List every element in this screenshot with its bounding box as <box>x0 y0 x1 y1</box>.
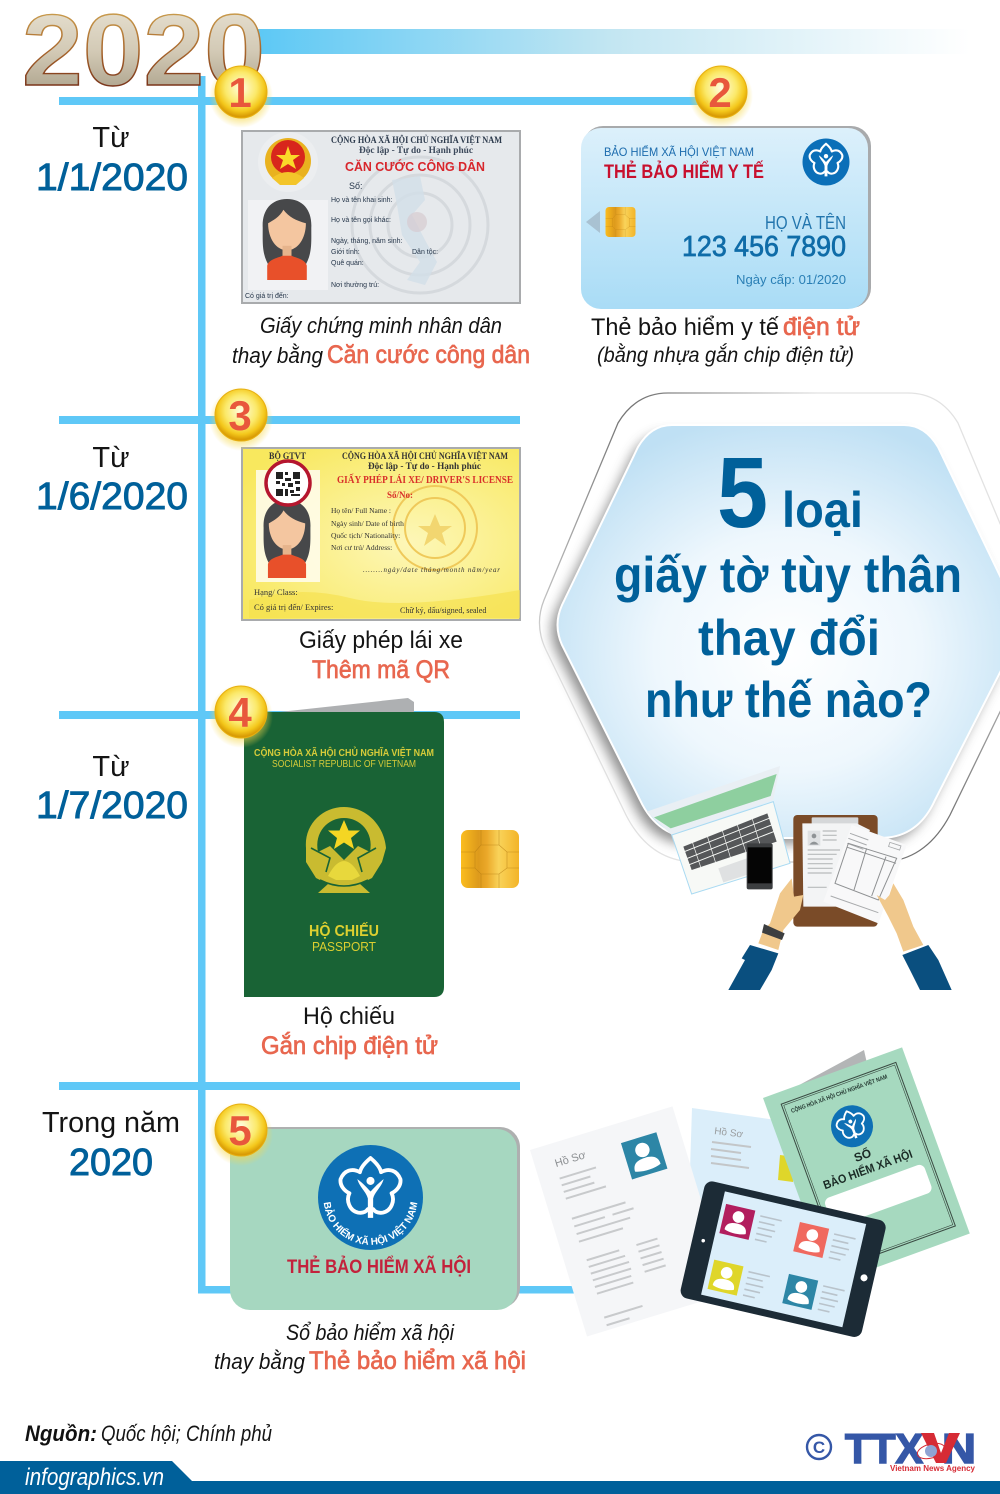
coin 4: 4 <box>228 689 252 736</box>
logo: TTXVN: Vietnam News Agency <box>890 1464 976 1473</box>
card: căn cước công dân: Quê quán: <box>331 260 364 267</box>
card: thẻ bảo hiểm y tế: HỌ VÀ TÊN <box>765 213 846 233</box>
coin 1: 1 <box>228 69 252 116</box>
card: căn cước công dân: Ngày, tháng, năm sinh: <box>331 238 403 245</box>
caption: card 3: Giấy phép lái xe <box>299 627 463 654</box>
card: giấy phép lái xe: Nơi cư trú/ Address: <box>331 543 392 552</box>
card: giấy phép lái xe: Quốc tịch/ Nationality: <box>331 531 400 540</box>
coin 4 <box>209 684 273 748</box>
caption: card 1 <box>232 313 530 369</box>
logo: TTXVN: TTX <box>845 1425 923 1472</box>
icon: BHXH round logo: BẢO HIỂM XÃ HỘI VIỆT NAM <box>324 1202 418 1246</box>
date label: 1/7/2020: 1/7/2020 <box>36 785 188 827</box>
illustration: laptop, clipboard, hands <box>647 766 952 990</box>
date label: trong năm 2020: 2020 <box>69 1142 153 1184</box>
card: thẻ bảo hiểm y tế: BẢO HIỂM XÃ HỘI VIỆT NAM <box>604 144 754 159</box>
card: thẻ bảo hiểm xã hội <box>230 1127 520 1310</box>
white paper with profile <box>530 1106 730 1336</box>
card: giấy phép lái xe: Họ tên/ Full Name : <box>331 506 391 515</box>
laptop <box>647 766 790 894</box>
caption: card 5: Thẻ bảo hiểm xã hội <box>309 1347 526 1375</box>
right hand and sleeve <box>877 883 952 990</box>
caption: card 2: (bằng nhựa gắn chip điện tử) <box>597 344 854 367</box>
coin 3: 3 <box>228 392 252 439</box>
card: thẻ bảo hiểm y tế: THẺ BẢO HIỂM Y TẾ <box>604 161 764 183</box>
source: Nguồn: <box>25 1421 97 1446</box>
date label: trong năm 2020: Trong năm <box>42 1107 180 1139</box>
card: thẻ bảo hiểm y tế: 123 456 7890 <box>682 231 846 263</box>
date label: 1/6/2020: Từ <box>92 442 130 474</box>
card: căn cước công dân: Họ và tên gọi khác: <box>331 217 391 224</box>
coin 3 <box>209 387 273 451</box>
card: giấy phép lái xe <box>242 448 520 620</box>
heading: giấy tờ tùy thân <box>614 547 962 603</box>
caption: card 2 <box>591 313 860 367</box>
blue paper: Hồ Sơ <box>714 1125 744 1141</box>
card: căn cước công dân: Nơi thường trú: <box>331 282 379 289</box>
card: giấy phép lái xe: Có giá trị đến/ Expires: <box>254 602 333 612</box>
clipboard <box>793 815 907 927</box>
blue paper <box>690 1108 840 1310</box>
coin 5 <box>209 1102 273 1166</box>
date label: 1/6/2020 <box>36 442 188 518</box>
passport <box>244 698 444 997</box>
caption: card 3: Thêm mã QR <box>312 656 450 684</box>
card: giấy phép lái xe: CỘNG HÒA XÃ HỘI CHỦ NGHĨA VIỆT NAM <box>342 449 508 462</box>
card: căn cước công dân: CỘNG HÒA XÃ HỘI CHỦ NGHĨA VIỆT NAM <box>331 133 502 146</box>
profile: yellow <box>708 1260 743 1296</box>
caption: passport <box>261 1003 438 1060</box>
date label: 1/6/2020: 1/6/2020 <box>36 476 188 518</box>
date label: 1/1/2020: 1/1/2020 <box>36 157 188 199</box>
caption: card 2: điện tử <box>783 313 860 341</box>
profile: coral <box>793 1222 829 1258</box>
card: giấy phép lái xe: ........ngày/date tháng/month năm/year <box>363 566 500 574</box>
card: căn cước công dân: CĂN CƯỚC CÔNG DÂN <box>345 159 485 174</box>
card: giấy phép lái xe: Số/No: <box>387 490 413 500</box>
heading: 5 <box>717 437 768 549</box>
white paper with profile: Hồ Sơ <box>554 1149 587 1170</box>
left hand and sleeve <box>728 878 803 990</box>
footer bar <box>0 1461 1000 1494</box>
card: giấy phép lái xe: Độc lập - Tự do - Hạnh phúc <box>368 461 481 471</box>
card: giấy phép lái xe: BỘ GTVT <box>269 451 306 461</box>
card: căn cước công dân <box>242 131 520 303</box>
card: thẻ bảo hiểm y tế <box>581 126 871 309</box>
footer bar: infographics.vn <box>25 1464 164 1491</box>
caption: card 2: Thẻ bảo hiểm y tế <box>591 314 780 341</box>
source: Quốc hội; Chính phủ <box>101 1421 272 1446</box>
source <box>25 1421 272 1446</box>
passport: SOCIALIST REPUBLIC OF VIETNAM <box>272 759 416 770</box>
profile: teal <box>782 1274 818 1310</box>
heading: loại <box>782 482 863 538</box>
icon: national emblem <box>265 138 311 185</box>
coin 2: 2 <box>708 69 732 116</box>
logo: TTXVN: N <box>942 1425 976 1472</box>
icon: BHXH logo <box>802 138 850 186</box>
social insurance book: SỔ <box>852 1145 873 1165</box>
logo: TTXVN <box>807 1425 976 1473</box>
logo: TTXVN: C <box>813 1438 825 1457</box>
coin 1 <box>209 64 273 128</box>
icon: BHXH round logo <box>318 1145 423 1250</box>
caption: card 3 <box>299 627 463 684</box>
caption: passport: Gắn chip điện tử <box>261 1031 438 1060</box>
hexagon panel <box>539 393 1000 990</box>
heading: như thế nào? <box>645 672 932 728</box>
coin 2 <box>689 64 753 128</box>
card: căn cước công dân: Dân tộc: <box>412 249 438 256</box>
date label: 1/7/2020: Từ <box>92 751 130 783</box>
icon: BHXH logo <box>825 1099 879 1153</box>
caption: card 5: thay bằng <box>214 1349 306 1374</box>
caption: card 5 <box>214 1320 526 1375</box>
coin 5: 5 <box>228 1107 252 1154</box>
card: giấy phép lái xe: Chữ ký, dấu/signed, sealed <box>400 606 486 615</box>
date label: 1/1/2020: Từ <box>92 122 130 154</box>
header gradient bar <box>255 29 970 54</box>
date label: trong năm 2020 <box>42 1107 180 1184</box>
card: căn cước công dân: Độc lập - Tự do - Hạnh phúc <box>359 145 473 155</box>
passport: PASSPORT <box>312 939 376 954</box>
icon: passport chip <box>461 830 519 888</box>
caption: card 1: Giấy chứng minh nhân dân <box>260 313 502 338</box>
heading <box>614 437 962 728</box>
card: giấy phép lái xe: Ngày sinh/ Date of birth <box>331 519 404 528</box>
passport: HỘ CHIẾU <box>309 921 379 940</box>
icon: gold emblem <box>306 807 386 893</box>
card: giấy phép lái xe: Hạng/ Class: <box>254 587 298 597</box>
card: căn cước công dân: Họ và tên khai sinh: <box>331 197 393 204</box>
card: căn cước công dân: Có giá trị đến: <box>245 291 289 300</box>
timeline rails <box>59 76 699 1294</box>
caption: card 1: thay bằng <box>232 343 324 368</box>
caption: card 5: Sổ bảo hiểm xã hội <box>286 1320 455 1345</box>
heading: thay đổi <box>698 610 880 666</box>
social insurance book: BẢO HIỂM XÃ HỘI <box>821 1146 914 1192</box>
passport: CỘNG HÒA XÃ HỘI CHỦ NGHĨA VIỆT NAM <box>254 746 434 759</box>
card: thẻ bảo hiểm xã hội: THẺ BẢO HIỂM XÃ HỘI <box>287 1256 471 1278</box>
date label: 1/7/2020 <box>36 751 188 827</box>
date label: 1/1/2020 <box>36 122 188 199</box>
social insurance book <box>763 1047 970 1284</box>
caption: passport: Hộ chiếu <box>303 1003 395 1030</box>
card: thẻ bảo hiểm y tế: Ngày cấp: 01/2020 <box>736 272 846 287</box>
card: giấy phép lái xe: GIẤY PHÉP LÁI XE/ DRIVER'S LICENSE <box>337 473 513 486</box>
card: căn cước công dân: Giới tính: <box>331 249 360 256</box>
profile: crimson <box>719 1204 755 1240</box>
card: căn cước công dân: Số: <box>349 181 363 191</box>
icon: QR code in red ring <box>266 461 310 505</box>
social insurance book: CỘNG HÒA XÃ HỘI CHỦ NGHĨA VIỆT NAM <box>790 1073 888 1115</box>
caption: card 1: Căn cước công dân <box>327 341 530 369</box>
tablet <box>679 1180 887 1339</box>
icon: profile photo <box>621 1132 667 1179</box>
